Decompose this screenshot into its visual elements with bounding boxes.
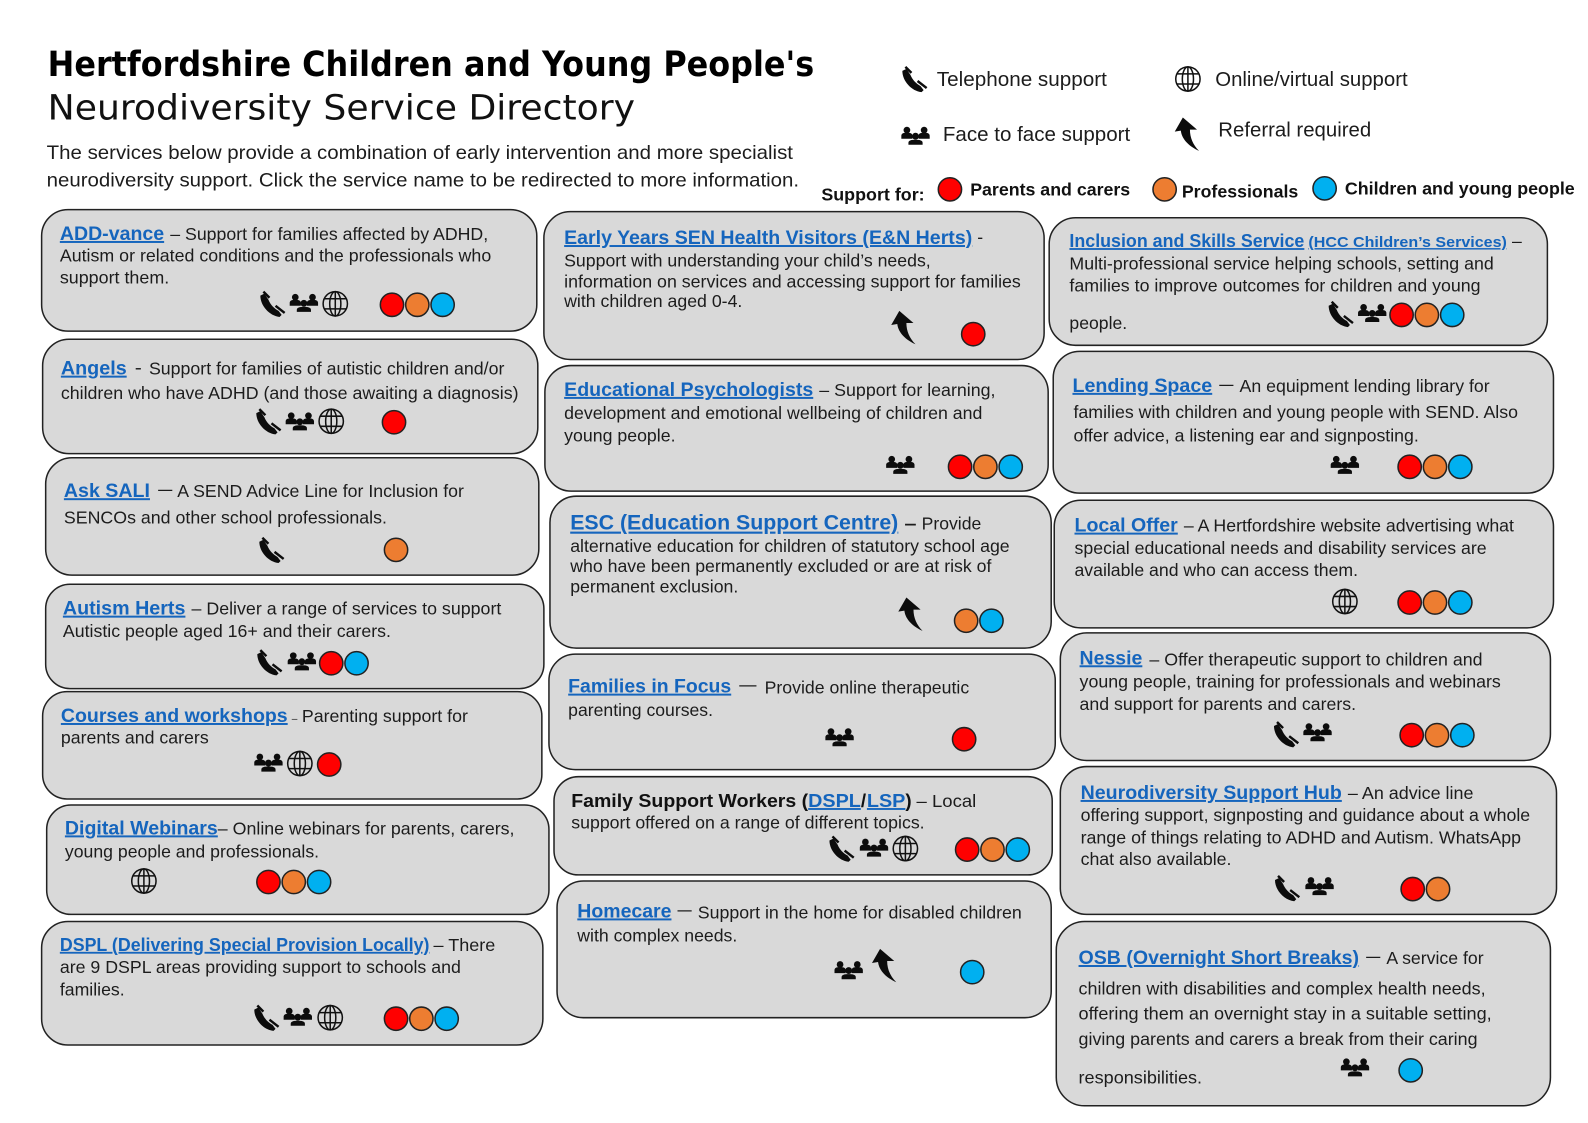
panel: Early Years SEN Health Visitors [544,212,1044,359]
panel: OSB: children with disabilities and complex health needs, [1079,978,1486,998]
panel: Family Support Workers: / [861,790,867,811]
panel: Early Years SEN Health Visitors: with children aged 0-4. [563,291,742,311]
legend: support for: Children and young people [1345,178,1575,198]
panel: Inclusion and Skills Service: families to improve outcomes for children and young [1069,276,1481,296]
panel: Local Offer [1054,500,1553,628]
panel: ESC: alternative education for children of statutory school age [570,536,1010,556]
panel: Lending Space: offer advice, a listening ear and signposting. [1073,426,1419,446]
panel: DSPL: – There [434,935,495,955]
panel: Local Offer: available and who can access them. [1074,560,1358,580]
panel: Family Support Workers [554,777,1052,875]
panel: Family Support Workers: DSPL [808,790,861,811]
panel: Angels: Support for families of autistic children and/or [149,359,505,379]
panel: Inclusion and Skills Service: people. [1069,313,1127,333]
panel: OSB: A service for [1386,948,1484,968]
panel: Inclusion and Skills Service: Multi-professional service helping schools, setting and [1069,253,1494,273]
introduction text: neurodiversity support. Click the service name to be redirected to more information. [47,170,799,191]
panel: Lending Space [1053,351,1553,493]
panel: Family Support Workers: Family Support Workers ( [571,790,809,811]
panel: Families in Focus [549,654,1055,770]
legend: support for: Support for: [821,184,925,204]
panel: Courses and workshops: parents and carers [61,727,209,747]
panel: Courses and workshops: Courses and workshops [61,705,288,727]
panel: Homecare: — [678,899,692,919]
panel: Families in Focus: parenting courses. [568,700,713,720]
panel: Educational Psychologists: development and emotional wellbeing of children and [564,403,982,423]
panel: ESC: permanent exclusion. [570,576,738,596]
panel: Nessie: young people, training for professionals and webinars [1080,672,1501,692]
panel: ADD-vance: – Support for families affected by ADHD, [170,224,488,244]
panel: Digital Webinars [47,805,549,914]
panel: Neurodiversity Support Hub [1060,767,1557,914]
panel: Homecare: Support in the home for disabled children [698,902,1022,922]
panel: Homecare [557,881,1051,1018]
introduction text [47,143,799,191]
panel: Autism Herts: – Deliver a range of services to support [191,599,501,619]
panel: Educational Psychologists: – Support for learning, [819,380,996,400]
panel: Courses and workshops [43,692,542,799]
panel: ADD-vance: support them. [60,268,169,288]
title: Neurodiversity Service Directory [48,88,635,128]
legend: support types: Referral required [1218,120,1371,142]
panel: Families in Focus: Provide online therapeutic [765,678,969,698]
panel: Local Offer: – A Hertfordshire website advertising what [1184,516,1514,536]
panel: Inclusion and Skills Service: Inclusion and Skills Service [1069,231,1304,251]
panel: Families in Focus: Families in Focus [568,676,731,698]
panel: Lending Space: Lending Space [1072,375,1212,397]
panel: DSPL: DSPL (Delivering Special Provision Locally) [60,935,429,955]
panel: OSB [1056,921,1550,1106]
panel: Nessie: and support for parents and carers. [1080,694,1356,714]
panel: Lending Space: — [1219,374,1234,394]
panel: ESC: who have been permanently excluded or are at risk of [569,556,992,576]
panel: Ask SALI: Ask SALI [64,480,150,502]
panel: Educational Psychologists [545,366,1048,491]
panel: Angels [43,339,538,454]
introduction text: The services below provide a combination of early intervention and more specialist [47,143,794,164]
panel: Courses and workshops: – [292,714,298,725]
panel: Family Support Workers: ) [905,790,912,811]
panel: Ask SALI: SENCOs and other school professionals. [64,508,387,528]
panel: ESC [550,496,1051,648]
panel: Early Years SEN Health Visitors: Early Years SEN Health Visitors (E&N Herts) [564,227,972,249]
panel: ESC: – [904,514,917,534]
panel: DSPL: are 9 DSPL areas providing support to schools and [60,957,461,977]
panel: Digital Webinars: – Online webinars for parents, carers, [218,818,515,838]
legend: support for: Parents and carers [970,179,1130,199]
panel: Autism Herts: Autism Herts [63,598,185,620]
panel: ESC: Provide [922,514,982,534]
panel: Homecare: Homecare [577,900,671,922]
legend: support types: Online/virtual support [1215,69,1408,91]
panel: Family Support Workers: – Local [917,791,976,811]
panel: ADD-vance: ADD-vance [60,223,164,245]
panel: ESC: ESC (Education Support Centre) [570,511,898,535]
panel: Early Years SEN Health Visitors: Support with understanding your child’s needs, [564,250,931,270]
legend: support types: Telephone support [937,69,1107,91]
legend: support types: Face to face support [943,124,1131,146]
panel: Local Offer: Local Offer [1074,515,1178,537]
panel: Early Years SEN Health Visitors: - [977,227,983,247]
title [48,45,814,128]
panel: Inclusion and Skills Service [1049,218,1547,345]
legend: support for: Professionals [1182,181,1298,201]
panel: Lending Space: An equipment lending library for [1240,376,1490,396]
panel: Homecare: with complex needs. [576,926,737,946]
panel: Nessie [1060,633,1550,760]
legend: support for [821,177,1575,204]
panel: ADD-vance: Autism or related conditions and the professionals who [60,245,491,265]
panel: Educational Psychologists: Educational Psychologists [564,379,813,401]
panel: Family Support Workers: support offered on a range of different topics. [571,812,925,832]
panel: Nessie: – Offer therapeutic support to children and [1149,649,1483,669]
panel: Angels: Angels [61,358,127,380]
panel: DSPL: families. [60,979,125,999]
panel: Lending Space: families with children and young people with SEND. Also [1073,402,1518,422]
panel: DSPL [42,921,543,1045]
panel: Neurodiversity Support Hub: chat also available. [1081,849,1231,869]
panel: Educational Psychologists: young people. [564,426,676,446]
panel: OSB: responsibilities. [1079,1068,1202,1088]
panel: Neurodiversity Support Hub: offering support, signposting and guidance about a whole [1081,805,1530,825]
panel: ADD-vance [42,210,537,331]
panel: Ask SALI: A SEND Advice Line for Inclusion for [177,481,464,501]
title: Hertfordshire Children and Young People's [48,45,814,85]
panel: Angels: children who have ADHD (and those awaiting a diagnosis) [61,383,519,403]
panel: Ask SALI: — [158,479,173,499]
panel: Local Offer: special educational needs and disability services are [1074,538,1487,558]
panel: OSB: offering them an overnight stay in a suitable setting, [1079,1004,1492,1024]
panel: OSB: giving parents and carers a break from their caring [1079,1029,1478,1049]
panel: Ask SALI [46,458,539,575]
panel: Digital Webinars: young people and professionals. [65,842,319,862]
panel: Inclusion and Skills Service: (HCC Children’s Services) [1308,235,1507,251]
panel: Early Years SEN Health Visitors: information on services and accessing support for families [564,272,1021,292]
panel: Angels: - [135,358,142,378]
panel: Family Support Workers: LSP [867,790,905,811]
panel: Neurodiversity Support Hub: – An advice line [1348,783,1474,803]
panel: Autism Herts [46,584,544,689]
panel: Nessie: Nessie [1080,647,1142,669]
panel: Neurodiversity Support Hub: Neurodiversity Support Hub [1081,782,1342,804]
panel: OSB: — [1366,946,1381,966]
panel: OSB: OSB (Overnight Short Breaks) [1079,947,1359,969]
panel: Families in Focus: — [739,675,757,695]
panel: Autism Herts: Autistic people aged 16+ and their carers. [63,621,391,641]
panel: Digital Webinars: Digital Webinars [65,817,218,839]
panel: Courses and workshops: Parenting support for [302,706,468,726]
panel: Neurodiversity Support Hub: range of things relating to ADHD and Autism. WhatsApp [1081,828,1521,848]
panel: Inclusion and Skills Service: – [1512,231,1522,251]
legend: support types [901,67,1408,151]
